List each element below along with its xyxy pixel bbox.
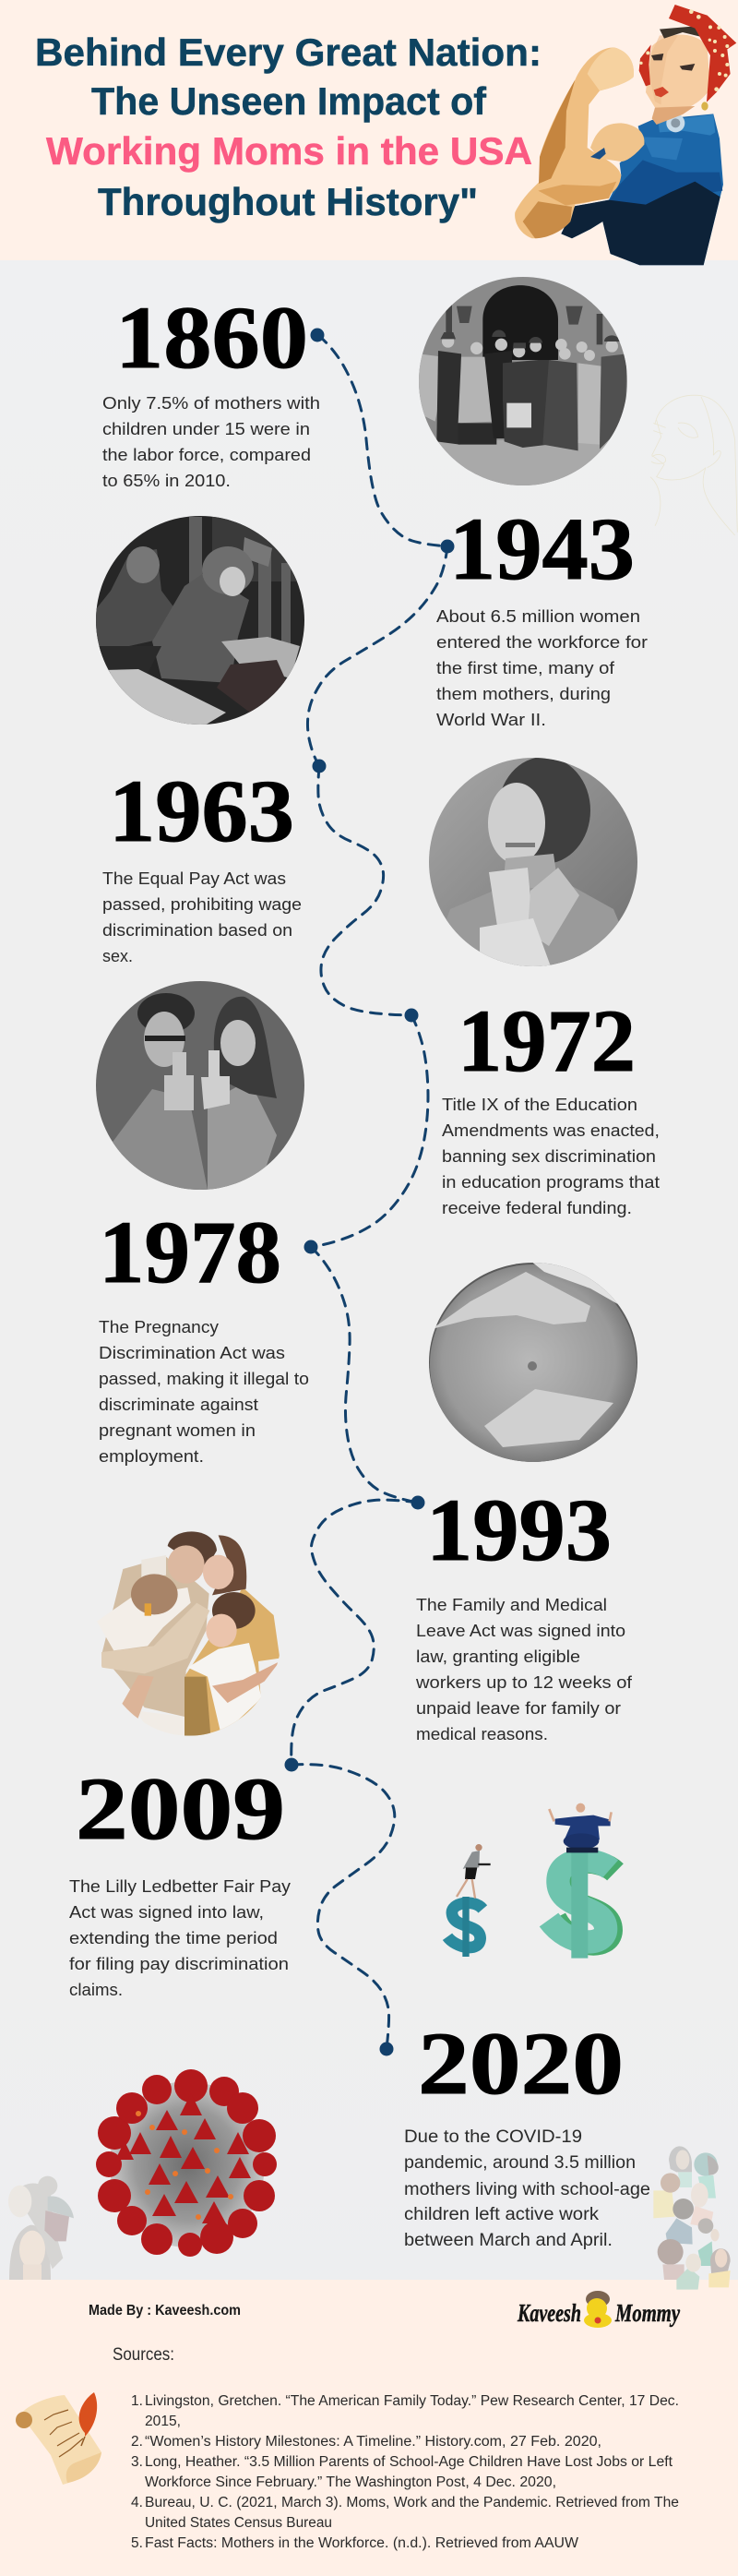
year and text: 2009: extending the time period	[69, 1928, 278, 1947]
icon: scroll and quill	[16, 2392, 101, 2485]
year and text: 2020: Due to the COVID-19	[404, 2127, 582, 2147]
year and text: 1993: 1993	[426, 1480, 612, 1579]
year and text: 1860: 1860	[115, 288, 308, 387]
decorative line art: woman's face	[650, 395, 737, 535]
footer panel	[0, 2280, 738, 2576]
year and text: 1972: receive federal funding.	[442, 1198, 632, 1217]
year and text: 2009	[69, 1759, 292, 1999]
year and text: 1963: The Equal Pay Act was	[102, 869, 286, 888]
year and text: 1963	[102, 761, 302, 965]
photo: 1943 women at work	[92, 512, 309, 729]
year and text: 1963: discrimination based on	[102, 920, 292, 940]
year and text: 1972: in education programs that	[442, 1172, 660, 1192]
sources list: Bureau, U. C. (2021, March 3). Moms, Work and the Pandemic. Retrieved from The	[145, 2495, 679, 2510]
year and text: 1978: discriminate against	[99, 1395, 258, 1414]
year and text: 1993: unpaid leave for family or	[416, 1698, 621, 1718]
header panel	[0, 0, 738, 260]
year and text: 1943: the first time, many of	[436, 658, 615, 677]
title: The Unseen Impact of	[91, 79, 487, 123]
year and text: 2020: 2020	[418, 2014, 624, 2113]
year and text: 1943: 1943	[449, 499, 635, 598]
photo: 1972 students thumbs up	[92, 978, 309, 1195]
year and text: 1978: 1978	[99, 1203, 281, 1301]
year and text: 1860: children under 15 were in	[102, 419, 310, 438]
photo: family hug	[97, 1531, 280, 1736]
year and text: 1860: to 65% in 2010.	[102, 471, 231, 490]
year and text: 2020	[404, 2014, 650, 2250]
year and text: 2020: pandemic, around 3.5 million	[404, 2153, 636, 2173]
year and text: 1972: 1972	[458, 991, 636, 1090]
sources list: 2015,	[145, 2414, 181, 2429]
year and text: 1943	[436, 499, 648, 729]
photo: 1963 woman with money	[429, 758, 637, 966]
year and text: 1963: sex.	[102, 946, 133, 965]
sources list: Livingston, Gretchen. “The American Family Today.” Pew Research Center, 17 Dec.	[145, 2393, 679, 2409]
year and text: 1972	[442, 991, 660, 1217]
year and text: 1978: passed, making it illegal to	[99, 1369, 309, 1388]
year and text: 1860	[102, 288, 320, 490]
logo: Kaveesh Mommy: Mommy	[614, 2299, 681, 2327]
title: Working Moms in the USA	[46, 129, 532, 173]
illustration: Rosie the Riveter	[515, 5, 736, 265]
year and text: 1993	[415, 1480, 633, 1743]
year and text: 1943: About 6.5 million women	[436, 606, 640, 626]
sources list: 4.	[131, 2495, 143, 2510]
year and text: 1963: passed, prohibiting wage	[102, 894, 302, 914]
year and text: 1993: workers up to 12 weeks of	[415, 1672, 633, 1692]
logo: Kaveesh Mommy	[517, 2291, 681, 2328]
year and text: 2009: Act was signed into law,	[69, 1902, 264, 1922]
photo: 1978 pregnant belly	[424, 1260, 646, 1468]
year and text: 1978: The Pregnancy	[99, 1317, 220, 1336]
photo: 1860 workers	[415, 274, 630, 489]
year and text: 1978: employment.	[99, 1446, 204, 1466]
sources list: 3.	[131, 2454, 143, 2470]
logo: Kaveesh Mommy: Kaveesh	[517, 2299, 581, 2327]
sources list: “Women’s History Milestones: A Timeline.” History.com, 27 Feb. 2020,	[145, 2434, 601, 2450]
year and text: 1943: World War II.	[436, 710, 546, 729]
title	[35, 30, 542, 223]
heading: sources: Sources:	[113, 2345, 174, 2365]
title: Behind Every Great Nation:	[35, 30, 542, 74]
year and text: 1993: medical reasons.	[416, 1724, 548, 1743]
icon: pay gap people on dollar signs	[447, 1803, 615, 1959]
sources list: 5.	[131, 2535, 143, 2551]
sources list: Long, Heather. “3.5 Million Parents of School-Age Children Have Lost Jobs or Left	[145, 2454, 673, 2470]
year and text: 1978: Discrimination Act was	[99, 1343, 285, 1362]
year and text: 2009: for filing pay discrimination	[69, 1954, 289, 1973]
year and text: 1963: 1963	[109, 761, 294, 860]
year and text: 1993: The Family and Medical	[416, 1595, 607, 1614]
year and text: 1978	[99, 1203, 309, 1466]
year and text: 1972: Title IX of the Education	[442, 1095, 637, 1114]
year and text: 2009: The Lilly Ledbetter Fair Pay	[69, 1876, 292, 1896]
sources list: 2.	[131, 2434, 143, 2450]
sources list	[131, 2393, 679, 2551]
year and text: 2020: between March and April.	[404, 2231, 613, 2250]
faded illustration: women group left	[8, 2176, 74, 2280]
credit: made by: Made By : Kaveesh.com	[89, 2303, 241, 2318]
page background panel	[0, 260, 738, 2280]
sources list: Fast Facts: Mothers in the Workforce. (n.d.). Retrieved from AAUW	[145, 2535, 578, 2551]
year and text: 1993: Leave Act was signed into	[416, 1621, 625, 1640]
faded illustration: women group right	[653, 2146, 731, 2290]
year and text: 2009: 2009	[76, 1759, 285, 1858]
timeline connector	[292, 335, 447, 2049]
year and text: 2020: children left active work	[404, 2205, 600, 2224]
year and text: 1993: law, granting eligible	[416, 1647, 580, 1666]
title: Throughout History"	[98, 180, 478, 223]
year and text: 1943: entered the workforce for	[436, 632, 648, 652]
year and text: 1860: the labor force, compared	[102, 445, 311, 464]
year and text: 1972: banning sex discrimination	[442, 1146, 656, 1166]
year and text: 2009: claims.	[69, 1980, 123, 1999]
sources list: 1.	[131, 2393, 143, 2409]
timeline dots	[284, 329, 454, 2056]
year and text: 1978: pregnant women in	[99, 1420, 256, 1440]
year and text: 1972: Amendments was enacted,	[442, 1120, 660, 1140]
sources list: United States Census Bureau	[145, 2515, 332, 2531]
year and text: 1860: Only 7.5% of mothers with	[102, 393, 320, 413]
year and text: 2020: mothers living with school-age	[404, 2180, 650, 2199]
year and text: 1943: them mothers, during	[436, 684, 611, 703]
illustration: coronavirus	[96, 2069, 277, 2257]
sources list: Workforce Since February.” The Washington Post, 4 Dec. 2020,	[145, 2474, 556, 2490]
